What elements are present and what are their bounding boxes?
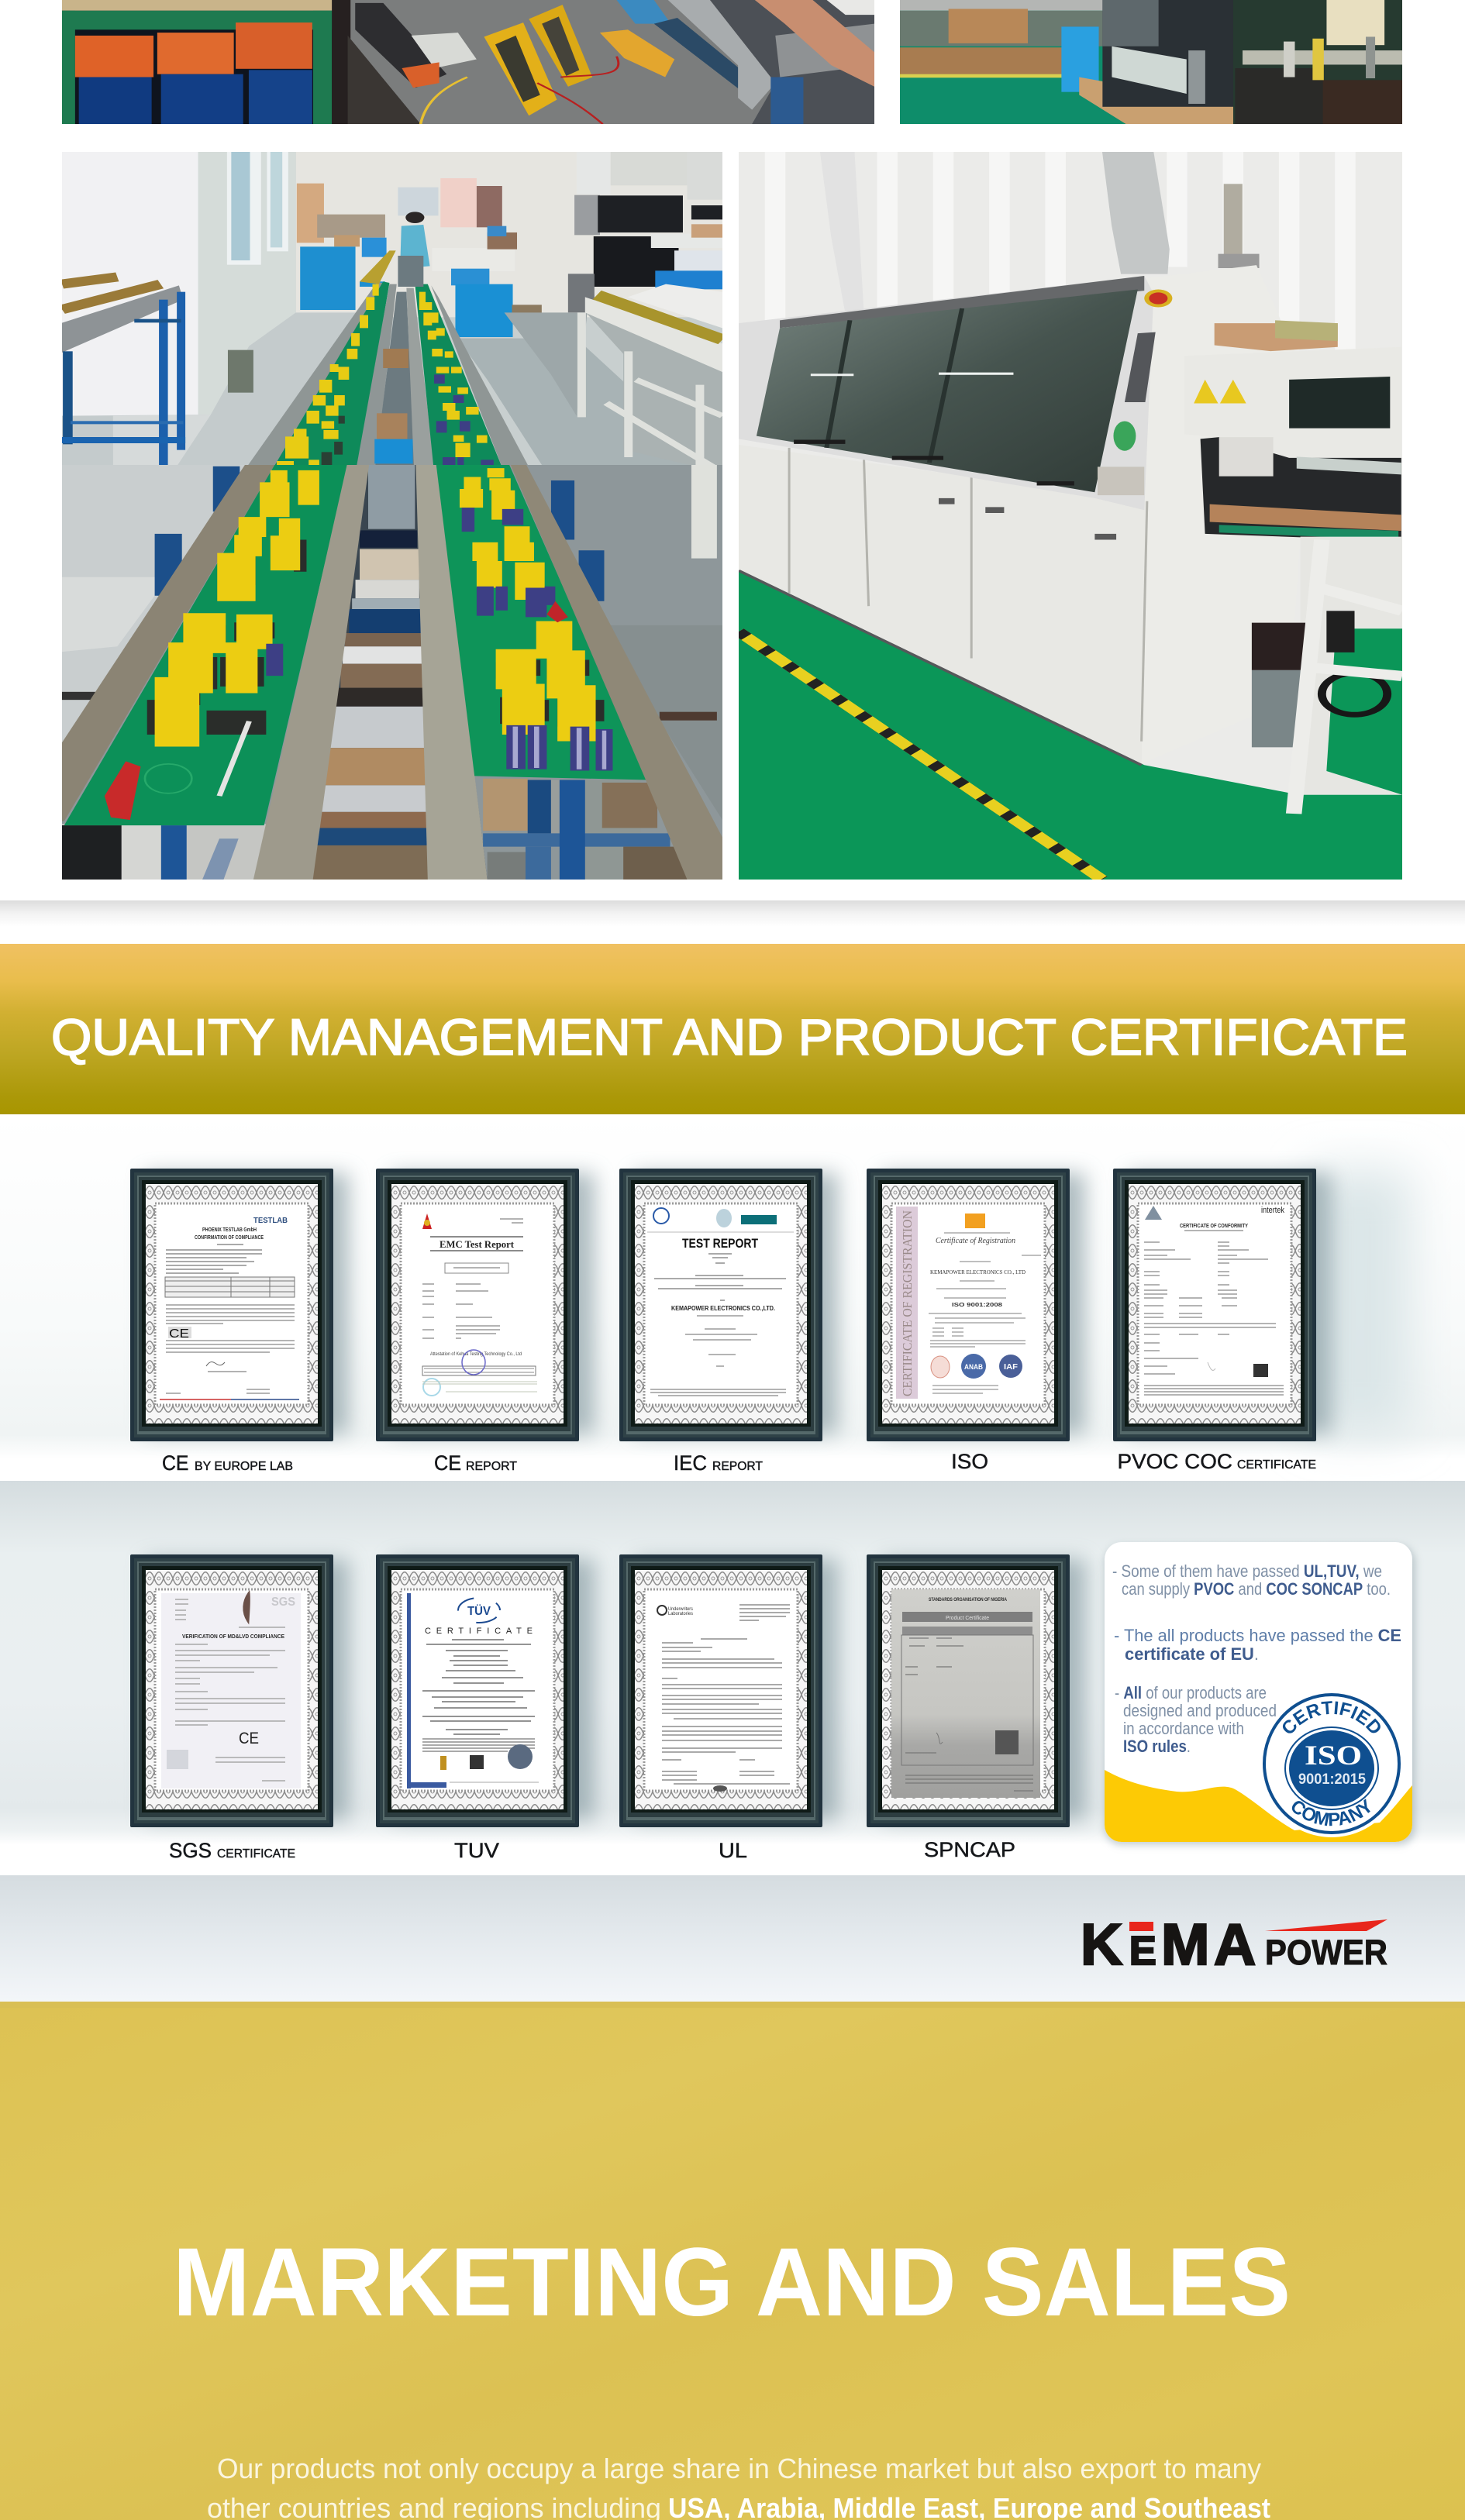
certificate: TUV bbox=[376, 1554, 595, 1827]
certificate: PVOC COC: CERTIFICATE OF CONFORMITY bbox=[1180, 1224, 1248, 1229]
certificate labels row 1: CE bbox=[434, 1451, 461, 1475]
certificate: CE by Europe lab: CE bbox=[169, 1327, 189, 1341]
ISO certified stamp: 9001:2015 bbox=[1298, 1771, 1366, 1788]
section: marketing and sales bbox=[0, 2002, 1465, 2520]
card text: designed and produced bbox=[1123, 1701, 1277, 1720]
heading banner: quality management bbox=[0, 944, 1465, 1114]
card text: can supply PVOC and COC SONCAP too. bbox=[1122, 1579, 1391, 1599]
certificate: CE report: Attestation of Kehua Testing Technology Co., Ltd bbox=[430, 1351, 522, 1357]
certificate labels row 1: CE bbox=[162, 1451, 189, 1475]
certificate: TUV: CERTIFICATE bbox=[425, 1627, 533, 1636]
logo: KEMA POWER: A bbox=[1214, 1912, 1256, 1977]
certificate labels row 2: CERTIFICATE bbox=[217, 1847, 295, 1861]
certificate labels row 1: IEC bbox=[674, 1451, 707, 1475]
certificate: UL: Laboratories bbox=[668, 1612, 693, 1616]
certificate labels row 2: UL bbox=[719, 1839, 747, 1862]
card text: in accordance with bbox=[1123, 1719, 1244, 1738]
certificate: SPNCAP: Product Certificate bbox=[946, 1616, 989, 1621]
certificate: CE by Europe lab: PHOENIX TESTLAB GmbH bbox=[202, 1227, 257, 1233]
certificate: CE by Europe lab: CONFIRMATION OF COMPLIANCE bbox=[195, 1235, 264, 1241]
heading: MARKETING AND SALES bbox=[173, 2229, 1291, 2336]
certificate labels row 2: SPNCAP bbox=[924, 1838, 1015, 1861]
certificate: SGS: CE bbox=[239, 1730, 259, 1747]
certificate labels row 1: BY EUROPE LAB bbox=[195, 1460, 293, 1473]
logo: KEMA POWER bbox=[1081, 1912, 1387, 1977]
certificate row 1 bbox=[130, 1169, 1332, 1441]
certificate: CE report bbox=[376, 1169, 595, 1441]
certificate: ISO: ANAB bbox=[964, 1363, 983, 1371]
certificate labels row 2: SGS bbox=[169, 1839, 212, 1862]
certificate: CE by Europe lab: TESTLAB bbox=[253, 1217, 288, 1225]
photo: transformer and pallet workshop bbox=[900, 0, 1402, 124]
certificate wall backgrounds bbox=[0, 1114, 1465, 2002]
certificate: IEC report bbox=[619, 1169, 838, 1441]
ISO certified stamp: CERTIFIED bbox=[1282, 1701, 1381, 1733]
certificate: ISO: Certificate of Registration bbox=[936, 1237, 1015, 1245]
shadow strip below photos bbox=[0, 900, 1465, 927]
certificate: SPNCAP bbox=[867, 1554, 1085, 1827]
photo: PCB conveyor assembly line bbox=[62, 152, 722, 880]
certificate: SGS bbox=[130, 1554, 349, 1827]
info card: certification notes bbox=[1101, 1542, 1418, 1849]
certificate: SGS: SGS bbox=[271, 1596, 295, 1609]
logo: KEMA POWER: E bbox=[1129, 1929, 1156, 1974]
certificate labels row 1 bbox=[162, 1450, 1316, 1475]
certificate: ISO: ISO 9001:2008 bbox=[952, 1303, 1002, 1308]
certificate: ISO: IAF bbox=[1004, 1363, 1018, 1372]
certificate: ISO: CERTIFICATE OF REGISTRATION bbox=[900, 1210, 915, 1396]
heading banner: quality management: QUALITY MANAGEMENT AND PRODUCT CERTIFICATE bbox=[51, 1008, 1408, 1065]
certificate labels row 1: REPORT bbox=[466, 1460, 517, 1473]
ISO certified stamp: COMPANY bbox=[1291, 1799, 1370, 1826]
logo: KEMA POWER: POWER bbox=[1265, 1933, 1387, 1972]
certificate labels row 1: PVOC COC bbox=[1118, 1450, 1232, 1473]
yellow wave bbox=[1105, 1770, 1412, 1842]
certificate: CE report: EMC Test Report bbox=[440, 1238, 515, 1250]
photo: wave soldering machine bbox=[739, 152, 1402, 880]
certificate: ISO: KEMAPOWER ELECTRONICS CO., LTD bbox=[930, 1269, 1026, 1275]
certificate: PVOC COC: intertek bbox=[1261, 1206, 1284, 1215]
certificate: CE by Europe lab bbox=[130, 1169, 349, 1441]
certificate: SGS: VERIFICATION OF MD&LVD COMPLIANCE bbox=[182, 1633, 284, 1640]
certificate: IEC report: TEST REPORT bbox=[682, 1236, 759, 1251]
certificate: PVOC COC bbox=[1113, 1169, 1332, 1441]
certificate: SPNCAP: STANDARDS ORGANISATION OF NIGERIA bbox=[929, 1597, 1007, 1603]
certificate: UL bbox=[619, 1554, 838, 1827]
card text bbox=[1112, 1561, 1401, 1756]
certificate: TUV: TÜV bbox=[467, 1603, 491, 1618]
certificate: IEC report: KEMAPOWER ELECTRONICS CO.,LTD. bbox=[671, 1305, 775, 1312]
card text: - All of our products are bbox=[1115, 1683, 1267, 1702]
paragraph: Our products not only occupy a large share in Chinese market but also export to many bbox=[217, 2453, 1261, 2484]
certificate labels row 2 bbox=[169, 1838, 1015, 1862]
card text: certificate of EU. bbox=[1125, 1644, 1259, 1664]
logo: KEMA POWER: M bbox=[1161, 1912, 1209, 1977]
certificate: ISO bbox=[867, 1169, 1085, 1441]
card text: - The all products have passed the CE bbox=[1114, 1626, 1401, 1645]
certificate labels row 1: ISO bbox=[951, 1450, 988, 1473]
certificate labels row 1: REPORT bbox=[712, 1460, 763, 1473]
certificate: UL: Underwriters bbox=[668, 1607, 693, 1612]
certificate labels row 2: TUV bbox=[454, 1839, 499, 1862]
paragraph bbox=[207, 2453, 1270, 2520]
certificate row 2 bbox=[130, 1554, 1085, 1827]
logo: KEMA POWER: K bbox=[1081, 1912, 1122, 1977]
ISO certified stamp: ISO bbox=[1305, 1740, 1362, 1771]
photo: battery and multimeter test bench bbox=[62, 0, 874, 124]
certificate labels row 1: CERTIFICATE bbox=[1237, 1458, 1316, 1472]
ISO certified stamp bbox=[1263, 1693, 1401, 1837]
card text: - Some of them have passed UL,TUV, we bbox=[1112, 1561, 1382, 1581]
card text: ISO rules. bbox=[1123, 1737, 1191, 1756]
